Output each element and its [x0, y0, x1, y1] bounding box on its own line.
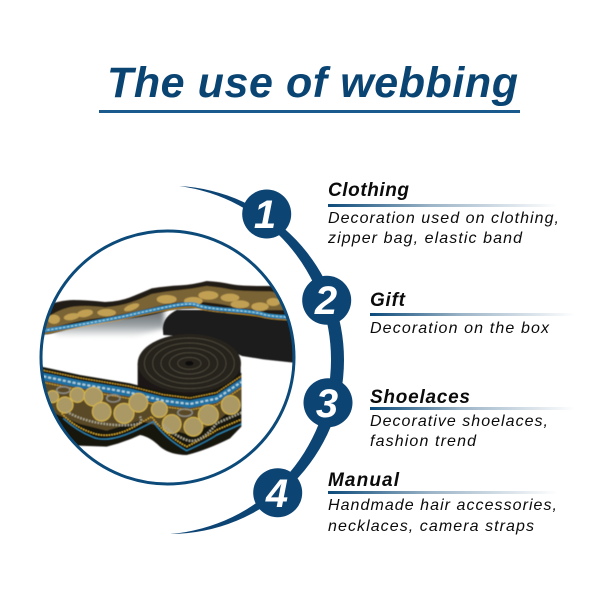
title: The use of webbing [107, 59, 518, 107]
roll top spiral [138, 334, 241, 393]
step 2: number badge [302, 276, 351, 325]
text block: Gift [370, 290, 575, 337]
folded black webbing behind roll [163, 310, 293, 363]
lower webbing band [37, 366, 241, 455]
step 3: number badge [304, 378, 352, 427]
text block: Manual [328, 470, 558, 535]
upper webbing strip [40, 281, 297, 335]
text block: Shoelaces [370, 387, 575, 450]
cast shadow under upper strip [50, 311, 168, 337]
text block: Shoelaces: fashion trend [370, 433, 477, 450]
step 2: number badge: 2 [314, 279, 337, 323]
text block: Clothing [327, 180, 559, 247]
text block: Shoelaces: Decorative shoelaces, [370, 413, 548, 430]
step 1: number badge [242, 190, 291, 238]
text block: Manual: Handmade hair accessories, [328, 497, 557, 514]
panel: webbing photo in circular frame [37, 231, 297, 484]
text block: Manual: Manual [328, 470, 400, 491]
big tapered arc [170, 186, 344, 534]
title underline [99, 110, 520, 113]
step 4: number badge: 4 [265, 472, 288, 516]
text block: Manual: necklaces, camera straps [328, 518, 534, 535]
step 1: number badge: 1 [254, 193, 276, 237]
text block: Clothing: Clothing [328, 180, 409, 201]
rolled webbing body [138, 363, 241, 400]
text block: Gift: Gift [370, 290, 406, 311]
text block: Shoelaces: Shoelaces [370, 387, 470, 408]
step 3: number badge: 3 [316, 382, 338, 426]
text block: Gift: Decoration on the box [370, 320, 550, 337]
text block: Clothing: zipper bag, elastic band [327, 230, 523, 247]
text block: Clothing: Decoration used on clothing, [328, 210, 559, 227]
circle frame [41, 231, 294, 484]
step 4: number badge [253, 468, 302, 517]
